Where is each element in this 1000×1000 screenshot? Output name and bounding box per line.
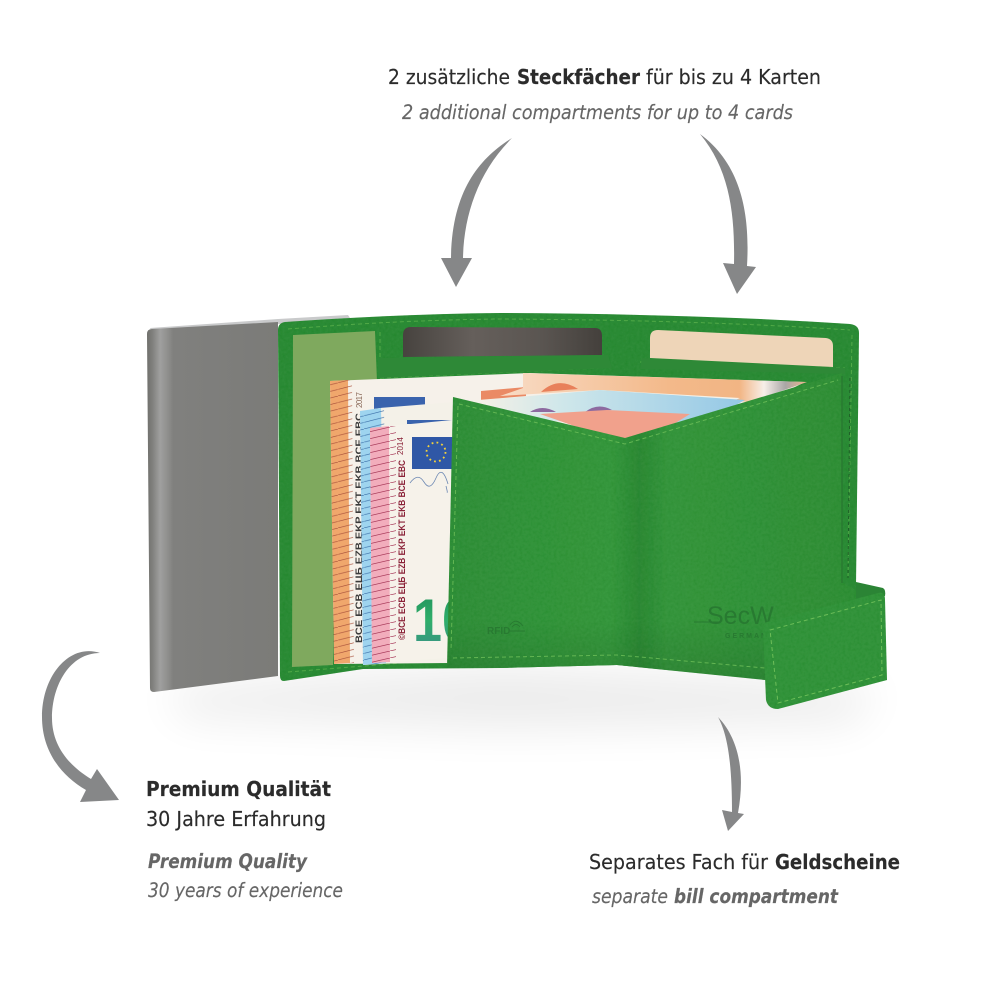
callout: premium quality English: 30 years of experience bbox=[148, 879, 343, 902]
callout: premium quality German bbox=[146, 777, 331, 831]
heading: compartments bbox=[388, 65, 821, 89]
embossed brand logo: GERMANY bbox=[725, 633, 775, 640]
arrow: to light card slot bbox=[700, 134, 756, 294]
heading: compartments: für bis zu 4 Karten bbox=[646, 65, 821, 89]
pocket edge under cards bbox=[378, 355, 845, 378]
embossed brand logo: SecW bbox=[707, 602, 774, 630]
denomination 10: 10 bbox=[413, 587, 471, 654]
suede lining panel bbox=[292, 331, 377, 667]
year text on orange note: 2017 bbox=[355, 391, 364, 408]
heading: compartments: 2 zusätzliche bbox=[388, 65, 510, 89]
serial text on pink note: ©BCE ECB ЕЦБ EZB EKP EKT EKB BCE EBC bbox=[397, 460, 408, 640]
light wooden card in slot bbox=[650, 330, 833, 367]
embossed brand logo bbox=[694, 602, 775, 640]
arrow: to bill compartment bbox=[718, 717, 744, 831]
callout: premium quality German: Premium Qualität bbox=[146, 777, 331, 801]
callout: bill compartment English bbox=[592, 885, 839, 908]
arrow: to dark card slot bbox=[441, 138, 512, 287]
callout: premium quality English bbox=[148, 850, 343, 902]
subheading: compartments: 2 additional compartments for up to 4 cards bbox=[402, 101, 793, 124]
front leather flap with V notch bbox=[447, 373, 856, 680]
leather closure strap bbox=[763, 582, 887, 709]
callout: premium quality German: 30 Jahre Erfahrung bbox=[146, 807, 326, 831]
floor shadow bbox=[170, 668, 880, 728]
callout: bill compartment German bbox=[589, 850, 900, 874]
signature bbox=[410, 472, 448, 492]
stitching on shell bbox=[288, 319, 852, 672]
dark card in slot bbox=[403, 327, 602, 357]
heading: compartments: Steckfächer bbox=[517, 65, 640, 89]
year text: 2014 bbox=[396, 437, 405, 455]
blue euro banknote bbox=[360, 390, 745, 665]
pink euro banknote bbox=[370, 410, 690, 663]
serial text on orange note: BCE ECB ЕЦБ EZB EKP EKT EKB BCE EBC bbox=[354, 413, 365, 643]
green leather outer shell bbox=[278, 313, 859, 681]
callout: bill compartment German: Separates Fach für bbox=[589, 850, 769, 874]
callout: bill compartment English: separate bbox=[592, 885, 668, 908]
callout: premium quality English: Premium Quality bbox=[148, 850, 308, 873]
callout: bill compartment English: bill compartment bbox=[674, 885, 839, 908]
metal card case bbox=[147, 315, 350, 692]
arrow: to metal case bbox=[42, 651, 119, 802]
flap stitching bbox=[451, 380, 838, 668]
orange euro banknote bbox=[330, 373, 807, 664]
wallet product photo bbox=[147, 313, 887, 709]
callout: bill compartment German: Geldscheine bbox=[775, 850, 900, 874]
EU flag bbox=[412, 437, 454, 469]
RFID embossed mark bbox=[487, 621, 525, 637]
RFID embossed mark: RFID bbox=[487, 626, 510, 637]
